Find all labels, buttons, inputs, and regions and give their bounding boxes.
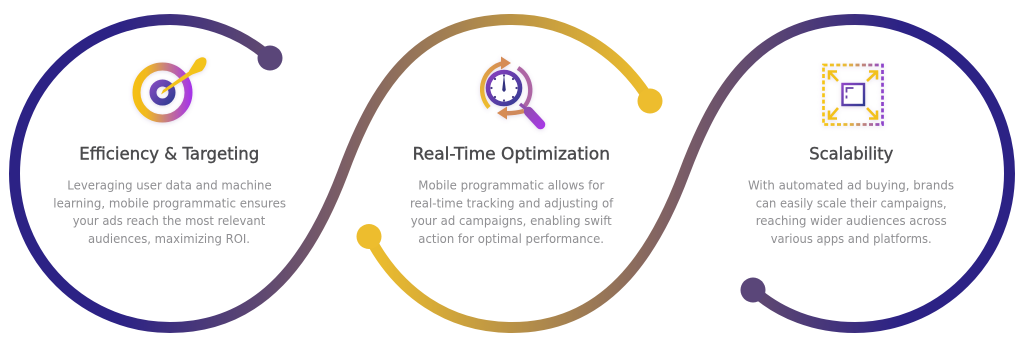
icon: magnifier with clock [482,56,540,124]
body text: scalability: can easily scale their campaigns, [756,195,947,210]
body text: real-time: your ad campaigns, enabling swift [411,213,612,228]
curve: gold arc into purple loop [356,20,1010,328]
body text: real-time: real-time tracking and adjusting of [410,195,614,210]
body text: scalability [748,178,954,246]
heading: Efficiency & Targeting: Efficiency & Targeting [79,144,259,164]
dot: gold start of second curve [356,224,382,249]
body text: real-time [410,178,614,246]
icon: scale arrows in dashed square [824,65,882,124]
text block: Real-Time Optimization [410,144,614,246]
body text: scalability: various apps and platforms. [771,231,932,246]
icon: target with dart [136,57,206,118]
body text: real-time: Mobile programmatic allows for [418,178,605,192]
heading: Scalability: Scalability [809,144,894,164]
dot: first curve start [258,46,282,70]
body text: scalability: With automated ad buying, brands [748,178,954,192]
dot: gold end of first curve [638,88,662,114]
body text: efficiency: Leveraging user data and machine [67,178,272,192]
body text: efficiency [53,178,286,246]
body text: scalability: reaching wider audiences across [756,213,947,228]
body text: real-time: action for optimal performance. [418,231,604,246]
text block: Scalability [748,144,954,246]
body text: efficiency: learning, mobile programmatic ensures [53,195,286,210]
text block: Efficiency & Targeting [53,144,286,246]
body text: efficiency: your ads reach the most relevant [73,213,265,228]
curve: purple loop into gold arc [14,20,650,328]
heading: Real-Time Optimization: Real-Time Optimization [413,144,610,164]
dot: second curve end [740,278,766,302]
body text: efficiency: audiences, maximizing ROI. [88,231,250,246]
